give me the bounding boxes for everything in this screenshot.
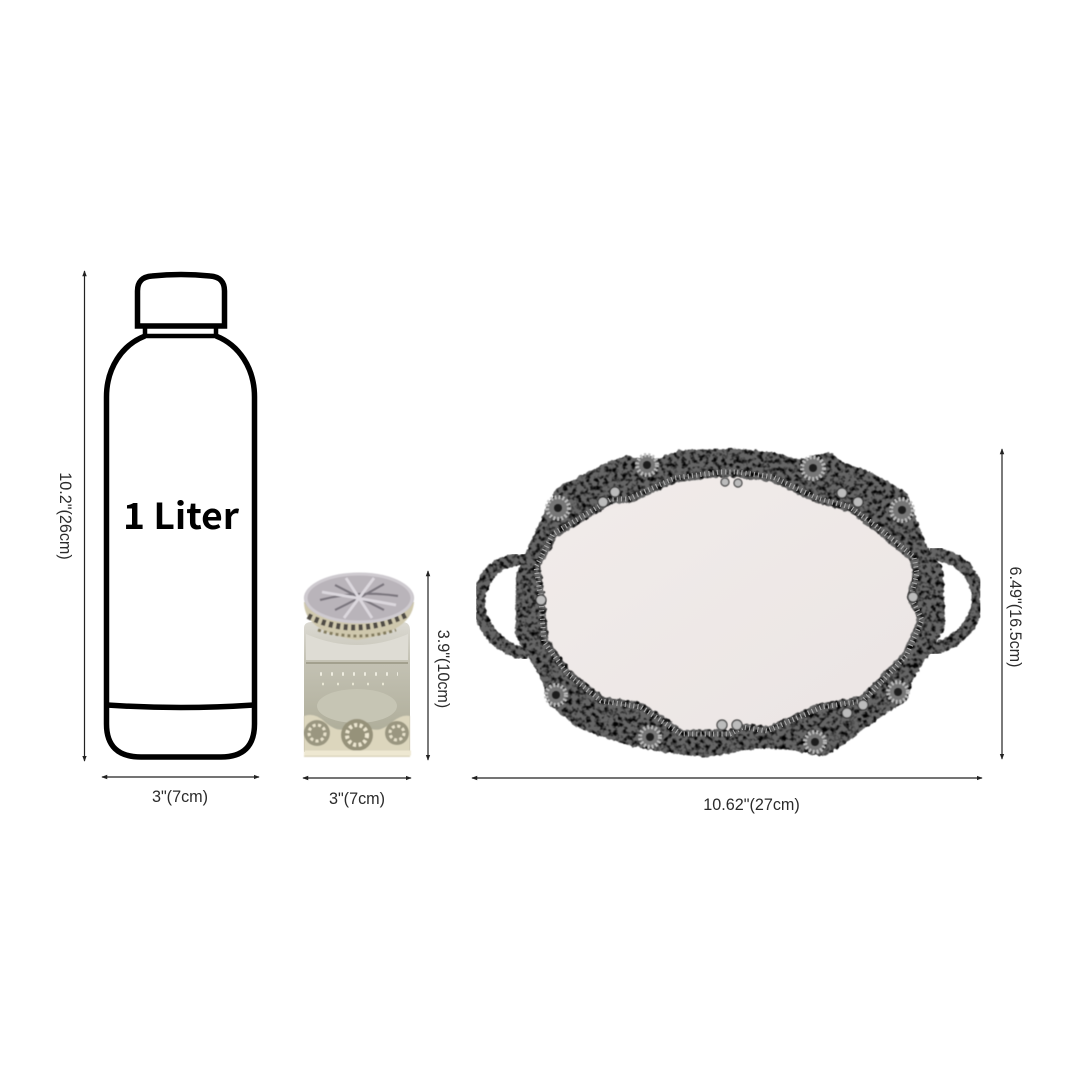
bottle width arrow xyxy=(102,776,259,778)
bottle body xyxy=(106,336,254,757)
jar height label: 3.9"(10cm) xyxy=(434,630,452,708)
tray width arrow xyxy=(472,777,982,779)
bottle capacity label: 1 Liter xyxy=(123,488,239,540)
jar photo xyxy=(304,573,414,757)
bottle cap xyxy=(138,274,224,326)
bottle base line xyxy=(107,705,254,708)
tray beads xyxy=(536,478,918,730)
bottle height arrow xyxy=(84,271,86,761)
jar width arrow xyxy=(303,777,411,779)
jar lid top xyxy=(304,573,414,623)
tray plate xyxy=(538,470,920,735)
tray photo xyxy=(479,449,978,757)
tray ornate frame xyxy=(516,449,945,757)
tray left handle xyxy=(479,559,526,654)
tray rope edge xyxy=(536,472,922,734)
bottle outline illustration xyxy=(106,274,254,757)
bottle neck xyxy=(145,328,216,336)
bottle width label: 3"(7cm) xyxy=(152,788,208,806)
jar base ornament xyxy=(304,715,411,757)
tray width label: 10.62"(27cm) xyxy=(703,796,800,814)
jar width label: 3"(7cm) xyxy=(329,790,385,808)
tray height arrow xyxy=(1001,449,1003,759)
jar lid band xyxy=(304,602,414,640)
tray height label: 6.49"(16.5cm) xyxy=(1006,566,1024,668)
jar glass body xyxy=(304,622,410,752)
jar height arrow xyxy=(427,571,429,760)
tray flower centres xyxy=(552,461,906,746)
tray right handle xyxy=(932,553,978,649)
bottle height label: 10.2"(26cm) xyxy=(56,472,74,560)
tray flowers xyxy=(546,455,913,752)
